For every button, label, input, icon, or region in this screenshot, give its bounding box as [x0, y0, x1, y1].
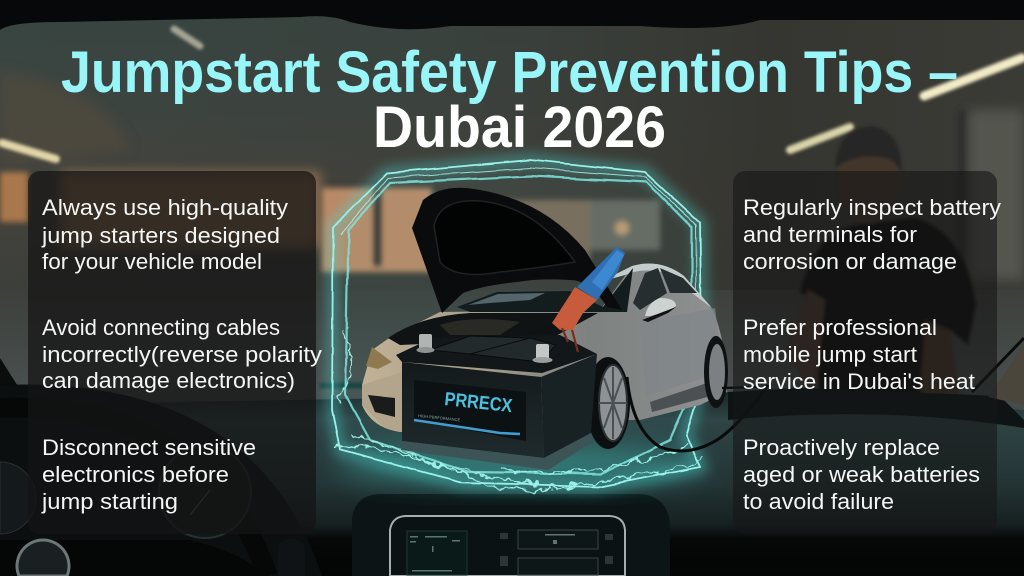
tip: sensitive electronics: Disconnect sensitive	[42, 435, 256, 460]
tip: high-quality jump starters: jump starters designed	[41, 223, 280, 248]
brand text: PRRECX	[443, 389, 514, 417]
left A-pillar	[0, 358, 28, 410]
title	[61, 40, 958, 160]
battery lid	[396, 335, 597, 373]
front bumper	[362, 372, 402, 432]
ceiling lights	[2, 29, 1022, 159]
title: Dubai 2026	[373, 95, 666, 160]
tip: sensitive electronics: jump starting	[41, 489, 178, 514]
warm glow: left window	[0, 172, 28, 222]
tip: replace batteries: to avoid failure	[743, 489, 894, 514]
small label text: HIGH PERFORMANCE	[418, 413, 461, 422]
tip: replace batteries: aged or weak batteries	[743, 462, 980, 487]
mechanic figure	[785, 126, 976, 410]
tip: high-quality jump starters: for your vehicle model	[42, 249, 262, 274]
side mirror	[645, 298, 676, 316]
tip: professional service: mobile jump start	[743, 342, 918, 367]
warm glow: behind left panel	[60, 172, 320, 248]
dashboard	[0, 392, 1024, 576]
right tips panel	[733, 171, 1002, 534]
right wall	[968, 110, 1024, 280]
tip: inspect battery	[743, 195, 1002, 274]
headlight	[366, 347, 392, 369]
tip: reverse polarity: incorrectly(reverse polarity	[42, 342, 323, 367]
tip: inspect battery: Regularly inspect battery	[743, 195, 1002, 220]
engine bay	[388, 313, 598, 345]
car with raised hood	[362, 188, 728, 449]
tip: replace batteries: Proactively replace	[743, 435, 940, 460]
car body	[362, 264, 727, 432]
tip: sensitive electronics	[41, 435, 256, 514]
neutral ceiling tone on the right	[0, 0, 1024, 290]
tip: high-quality jump starters: Always use high-quality	[42, 195, 289, 220]
battery base ledge	[401, 433, 594, 470]
tip: inspect battery: corrosion or damage	[743, 249, 957, 274]
battery label	[414, 380, 526, 441]
jumper clamp	[552, 247, 625, 352]
steering wheel and cluster	[0, 385, 322, 576]
rear wheel	[704, 336, 728, 408]
centre console with display	[352, 494, 670, 576]
tip: professional service: Prefer professional	[743, 315, 937, 340]
top roof band	[0, 0, 1024, 30]
side windows	[633, 268, 697, 310]
tip: high-quality jump starters	[41, 195, 289, 274]
wall pillars	[374, 110, 967, 280]
battery front face	[402, 362, 544, 458]
right dash shelf	[728, 388, 1024, 428]
tip: sensitive electronics: electronics before	[42, 462, 229, 487]
car battery	[396, 334, 597, 470]
battery side face	[541, 354, 597, 458]
open hood	[412, 188, 622, 313]
title: Jumpstart Safety Prevention Tips –	[61, 40, 958, 105]
blue stripe	[414, 420, 520, 434]
windshield	[457, 268, 633, 312]
door panel shading	[640, 308, 723, 396]
front wheel	[586, 357, 630, 449]
tip: inspect battery: and terminals for	[743, 222, 918, 247]
tip: reverse polarity: Avoid connecting cables	[42, 315, 280, 340]
jumper cable	[500, 325, 768, 451]
left tips panel	[28, 171, 323, 534]
protective energy shield	[332, 160, 705, 489]
tip: reverse polarity: can damage electronics)	[42, 368, 295, 393]
dark floor band	[320, 383, 370, 388]
right A-pillar	[988, 345, 1024, 405]
warm ceiling sweep	[0, 70, 130, 165]
tip: professional service: service in Dubai's heat	[743, 369, 976, 394]
terminals	[416, 334, 552, 363]
roof highlight	[600, 264, 712, 308]
tip: replace batteries	[743, 435, 980, 514]
warm glow: centre window	[322, 188, 660, 272]
tip: professional service	[743, 315, 976, 394]
icon: steering wheel logo	[17, 540, 69, 576]
tip: reverse polarity	[42, 315, 323, 393]
